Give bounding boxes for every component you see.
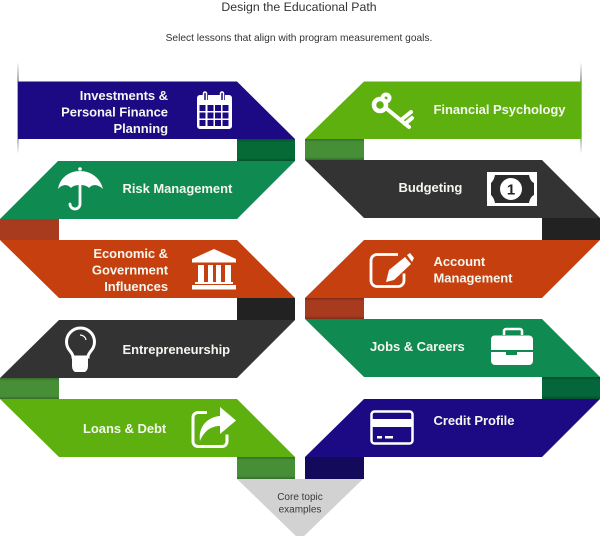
icon: credit card bbox=[372, 412, 412, 444]
label: investments: Investments & bbox=[80, 88, 168, 103]
icon: bank building bbox=[192, 249, 236, 290]
label: account management: Management bbox=[434, 270, 513, 286]
label: investments: Planning bbox=[114, 121, 168, 136]
panel: jobs and careers bbox=[305, 319, 600, 399]
label: investments: Personal Finance bbox=[61, 104, 168, 120]
label: entrepreneurship: Entrepreneurship bbox=[122, 342, 230, 357]
panel: loans and debt bbox=[0, 399, 295, 479]
label: financial psychology: Financial Psychology bbox=[434, 102, 566, 117]
panel: economic and government influences bbox=[0, 240, 295, 320]
callout: core topic examples: examples bbox=[279, 504, 321, 516]
left edge shadow bbox=[17, 62, 19, 154]
panel: financial psychology bbox=[305, 82, 581, 160]
label: economic: Influences bbox=[104, 279, 168, 294]
panel: entrepreneurship bbox=[0, 320, 295, 399]
label: budgeting: Budgeting bbox=[398, 180, 462, 195]
callout: core topic examples bbox=[237, 479, 363, 536]
panel: investments and personal finance planning bbox=[18, 82, 295, 161]
icon: calendar bbox=[197, 92, 232, 129]
panel: account management bbox=[305, 240, 600, 319]
panel: credit profile bbox=[305, 399, 600, 479]
label: loans and debt: Loans & Debt bbox=[83, 421, 167, 436]
icon: key bbox=[374, 94, 412, 127]
label: account management: Account bbox=[434, 254, 486, 269]
icon: briefcase bbox=[491, 329, 533, 365]
icon: share arrow bbox=[193, 407, 236, 446]
panel: budgeting bbox=[305, 160, 600, 240]
label: risk management: Risk Management bbox=[122, 181, 233, 196]
icon: umbrella bbox=[58, 167, 103, 209]
icon: light bulb bbox=[66, 328, 94, 372]
icon: dollar bill: 1 bbox=[507, 182, 515, 198]
subtitle: Select lessons that align with program measurement goals. bbox=[166, 33, 432, 44]
panel: risk management bbox=[0, 161, 295, 240]
icon: pencil on pad bbox=[371, 253, 414, 286]
label: jobs and careers: Jobs & Careers bbox=[370, 339, 465, 354]
label: economic: Government bbox=[92, 262, 169, 278]
icon: dollar bill bbox=[487, 172, 537, 206]
title: Design the Educational Path bbox=[221, 0, 377, 14]
label: economic: Economic & bbox=[93, 246, 168, 261]
callout: core topic examples: Core topic bbox=[277, 492, 323, 503]
right edge shadow bbox=[580, 62, 582, 154]
label: credit profile: Credit Profile bbox=[434, 413, 514, 428]
